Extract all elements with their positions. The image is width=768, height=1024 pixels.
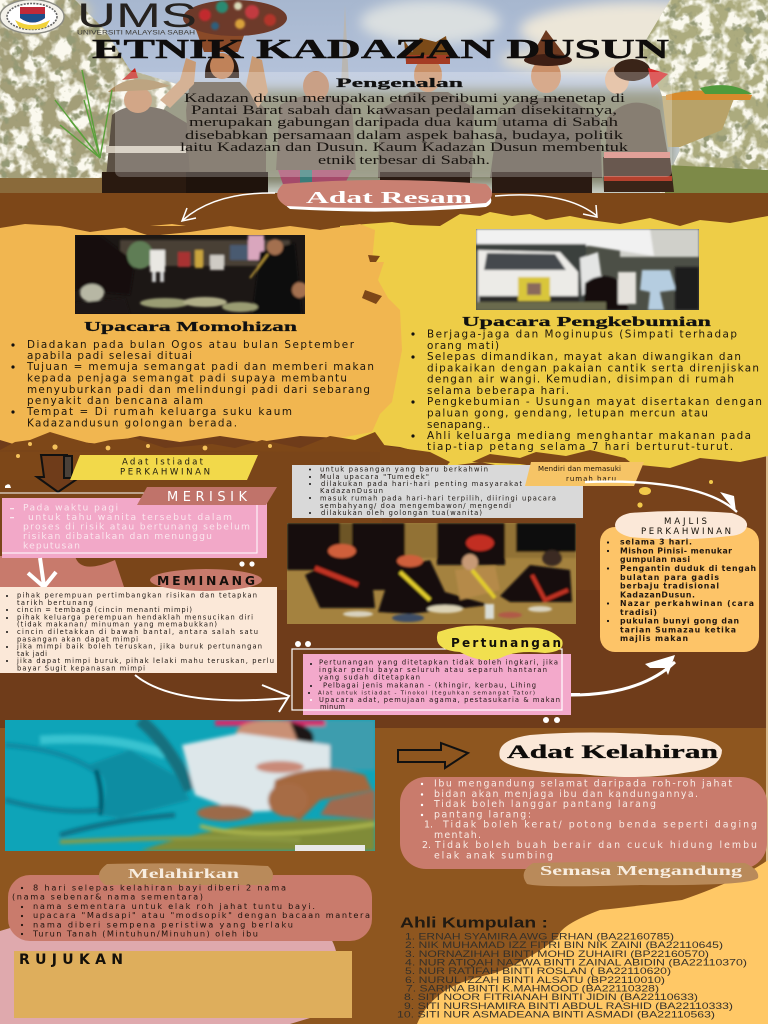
panel: Meminang: jika mimpi baik boleh teruskan, jika buruk pertunangan (16, 643, 262, 651)
heading: Upacara Momohizan: Upacara Momohizan (84, 320, 297, 335)
panel: Meminang: jika dapat mimpi buruk, pihak lelaki mahu teruskan, perlu (16, 657, 274, 665)
text block: Momohizan bullets: Tempat = Di rumah keluarga suku kaum (26, 406, 292, 418)
arrow: Pertunangan to Majlis (571, 655, 675, 695)
intro text block: disebabkan persamaan dalam aspek bahasa, budaya, politik (185, 128, 624, 142)
person 4 (378, 36, 474, 193)
text block: Ahli Kumpulan members: 3. NORNAZIHAH BINTI MOHD ZUHAIRI (BP22160570) (405, 949, 709, 959)
panel: Majlis Perkahwinan: bulatan para gadis (620, 573, 719, 582)
panel: Melahirkan: Melahirkan (128, 866, 240, 881)
panel: Semasa Mengandung: Ibu mengandung selamat daripada roh-roh jahat (434, 778, 732, 790)
panel: Majlis Perkahwinan: berbaju tradisional (620, 582, 719, 590)
panel: Majlis Perkahwinan: selama 3 hari. (620, 538, 692, 546)
panel: Meminang: bayar Sugit kepanasan mimpi (17, 664, 145, 672)
translucent intro panel (115, 72, 672, 177)
panel: Semasa Mengandung: Tidak boleh langgar pantang larang (433, 799, 656, 810)
panel: Melahirkan: (nama sebenar& nama sementara) (12, 892, 203, 902)
text block: Pengkebumian bullets: dengan air wangi. Kemudian, disimpan di rumah (427, 374, 734, 386)
text block: Pengkebumian bullets: Berjaga-jaga dan Moginupus (Simpati terhadap (427, 328, 737, 340)
panel: Pertunangan: Upacara adat, pemujaan agama, pestasukaria & makan (319, 696, 560, 704)
text block: Pengkebumian bullets: Selepas dimandikan, mayat akan diwangikan dan (427, 351, 741, 363)
panel: Majlis Perkahwinan: Mishon Pinisi- menukar (620, 546, 732, 556)
panel: Meminang: cincin = tembaga (cincin menanti mimpi) (17, 606, 192, 614)
banner: Adat Resam: Adat Resam (306, 188, 472, 207)
panel: Majlis Perkahwinan: MAJLIS (664, 517, 707, 527)
photo: Upacara Momohizan (75, 235, 308, 314)
panel: yellow right background (340, 212, 768, 470)
panel: Pertunangan: ingkar perlu bayar seluruh atau separuh hantaran (319, 666, 547, 674)
photo: Tunang ceremony (287, 523, 576, 624)
panel: Melahirkan: nama sementara untuk elak roh jahat tuntu bayi. (33, 901, 315, 911)
panel: Rujukan (14, 951, 352, 1018)
panel: Meminang: pasangan akan dapat mimpi (17, 635, 138, 643)
intro text block: laitu Kadazan dan Dusun. Kaum Kadazan Dusun membentuk (180, 140, 629, 154)
text block: Pengkebumian bullets: Pengkebumian - Usungan mayat disertakan dengan (427, 396, 762, 408)
panel: Melahirkan: nama diberi sempena peristiwa yang berlaku (33, 920, 293, 930)
panel: Semasa Mengandung: 2. (422, 840, 431, 851)
banner: Adat Istiadat Perkahwinan: Adat Istiadat (122, 458, 204, 468)
banner: Adat Istiadat Perkahwinan: PERKAHWINAN (120, 468, 210, 478)
panel: Semasa Mengandung: pantang larang: (434, 810, 531, 820)
intro text block: Kadazan dusun merupakan etnik peribumi yang menetap di (184, 91, 626, 105)
person 5 (490, 30, 602, 193)
arrow: curved to Majlis Perkahwinan (585, 480, 737, 512)
panel: Majlis Perkahwinan: Pengantin duduk di tengah (620, 564, 756, 573)
panel: grey Tumedek notes: dilakukan pada hari-hari penting masyarakat (321, 480, 522, 488)
text block: Ahli Kumpulan members: 9. SITI NURSHAMIRA BINTI ABDUL RASHID (BA22110333) (404, 1001, 733, 1011)
text block: Ahli Kumpulan members: 2. NIK MUHAMAD IZZ FITRI BIN NIK ZAINI (BA22110645) (405, 940, 723, 950)
panel: Meminang: (tidak makanan/ minuman yang memabukkan) (17, 621, 217, 629)
intro text block: Pengenalan (336, 75, 464, 90)
panel: Majlis Perkahwinan: gumpulan nasi (620, 555, 690, 564)
panel: Merisik (0, 484, 277, 558)
panel: Meminang: tak jadi (17, 650, 47, 658)
text block: Momohizan bullets (11, 339, 374, 430)
text block: Ahli Kumpulan members: 1. ERNAH SYAMIRA AWG ERHAN (BA22160785) (405, 932, 674, 942)
text block: Pengkebumian bullets: tiap-tiap petang selama 7 hari berturut-turut. (427, 441, 733, 453)
panel: orange left background (0, 224, 402, 446)
panel: Merisik: untuk tahu wanita tersebut dalam (28, 512, 232, 523)
panel: Majlis Perkahwinan: majlis makan (620, 634, 688, 643)
intro text block: Pantai Barat sabah dan kawasan pedalaman disekitarnya, (191, 103, 617, 117)
banner: Mandiri dan memasuki rumah baru: Mendiri dan memasuki (538, 465, 621, 473)
text block: Pengkebumian bullets: orang mati) (427, 340, 499, 352)
arrow: curved to Pertunangan (135, 675, 289, 712)
text block: Pengkebumian bullets: dipakaikan dengan pakaian cantik serta direnjiskan (427, 362, 759, 374)
text block: Pengkebumian bullets: selama beberapa hari. (427, 385, 569, 397)
panel: grey Tumedek notes: sembahyang/ doa mengembawon/ mengendi (320, 502, 511, 510)
panel: Majlis Perkahwinan: pukulan bunyi gong dan (620, 616, 739, 626)
panel: Melahirkan (8, 863, 372, 941)
text block: Momohizan bullets: Tujuan = memuja semangat padi dan memberi makan (26, 361, 374, 373)
panel: Semasa Mengandung: 1. (424, 820, 433, 830)
panel: Merisik: keputusan (23, 540, 80, 552)
banner: Mandiri dan memasuki rumah baru (525, 462, 644, 486)
banner: Adat Istiadat Perkahwinan (70, 455, 258, 480)
panel: Meminang: MEMINANG (157, 573, 255, 588)
panel: Pertunangan (292, 625, 571, 715)
quote marks: Pertunangan (295, 641, 311, 647)
wordmark: UMS (77, 0, 197, 36)
text block: Ahli Kumpulan members: 8. SITI NOOR FITRIANAH BINTI JIDIN (BA22110633) (404, 992, 698, 1002)
person 1 (55, 68, 192, 193)
panel: Majlis Perkahwinan (600, 511, 759, 652)
person 2 with basket (160, 0, 287, 193)
panel: Melahirkan: 8 hari selepas kelahiran bayi diberi 2 nama (33, 882, 286, 892)
arrow: white down (28, 558, 56, 587)
panel: Majlis Perkahwinan: KadazanDusun. (620, 590, 695, 600)
brown band and torn paper panels (0, 193, 768, 480)
panel: Meminang: cincin diletakkan di bawah bantal, antara salah satu (17, 628, 258, 636)
text block: Ahli Kumpulan members: 5. NUR RATIFAH BINTI ROSLAN ( BA22110620) (405, 966, 671, 976)
panel: Semasa Mengandung: bidan akan menjaga ibu dan kandungannya. (434, 789, 698, 800)
text block: Pengkebumian bullets: senapang.. (427, 419, 490, 431)
icon: outlined right arrow (398, 743, 468, 768)
panel: grey Tumedek notes: untuk pasangan yang baru berkahwin (320, 466, 488, 474)
logo: Universiti Malaysia Sabah crest (0, 0, 64, 34)
pink blob behind Rujukan (0, 925, 352, 1024)
heading: Adat Kelahiran (499, 732, 722, 777)
panel: grey Tumedek notes (292, 465, 583, 518)
text block: Ahli Kumpulan members: 10. SITI NUR ASMADEANA BINTI ASMADI (BA22110563) (397, 1010, 715, 1020)
panel: Melahirkan: Turun Tanah (Mintuhun/Minuhun) oleh ibu (32, 928, 258, 938)
panel: grey Tumedek notes: dilakukan oleh golongan tua(wanita) (321, 509, 482, 517)
panel: Majlis Perkahwinan: tarian Sumazau ketika (620, 626, 736, 634)
panel: Meminang: pihak keluarga perempuan hendaklah mensucikan diri (17, 613, 253, 621)
decorative rose blob behind Merisik and Meminang (0, 556, 125, 590)
panel: Majlis Perkahwinan: Nazar perkahwinan (cara (620, 599, 754, 608)
panel: grey Tumedek notes: Mula upacara "Tumedek" (320, 473, 429, 481)
torn brown splatter (0, 226, 640, 480)
text block: Momohizan bullets: menyuburkan padi dan melindungi padi dari sebarang (27, 384, 370, 396)
panel: grey Tumedek notes: KadazanDusun (320, 487, 383, 495)
panel: Semasa Mengandung: mentah. (434, 830, 481, 841)
panel: Meminang: pihak perempuan pertimbangkan risikan dan tetapkan (17, 592, 257, 600)
decorative white line and quote mark (543, 694, 580, 723)
heading: Adat Kelahiran: Adat Kelahiran (507, 742, 719, 763)
text block: Momohizan bullets: kepada penjaga semangat padi supaya membantu (27, 372, 347, 384)
panel: Pertunangan: yang sudah ditetapkan (319, 674, 420, 682)
panel: Semasa Mengandung: Semasa Mengandung (540, 864, 742, 879)
panel: Merisik: proses di risik atau bertunang sebelum (23, 522, 250, 532)
text block: Pengkebumian bullets (411, 328, 762, 453)
panel: Pertunangan: Alat untuk istiadat - Tinokol (teguhkan semangat Tator) (318, 690, 535, 696)
banner: Mandiri dan memasuki rumah baru: rumah baru (566, 475, 616, 483)
arrow: right curved (495, 195, 597, 217)
heading: Upacara Pengkebumian: Upacara Pengkebumian (462, 315, 711, 330)
panel: Melahirkan: upacara "Madsapi" atau "modsopik" dengan bacaan mantera (33, 910, 370, 920)
text block: Ahli Kumpulan members (397, 916, 747, 1020)
text block: Pengkebumian bullets: paluan gong, gendang, letupan mercun atau (427, 408, 708, 420)
wordmark: UMS: UNIVERSITI MALAYSIA SABAH (77, 30, 195, 36)
panel: Semasa Mengandung: Tidak boleh kerat/ potong benda seperti daging (442, 820, 757, 830)
photo: Upacara Pengkebumian (476, 229, 699, 310)
panel: Pertunangan: minum (320, 703, 345, 711)
intro text block (180, 75, 629, 167)
text block: Momohizan bullets: Kadazandusun golongan berada. (27, 418, 237, 430)
panel: Semasa Mengandung: Tidak boleh buah berair dan cucuk hidung lembu (434, 840, 757, 851)
text block: Ahli Kumpulan members: 6. NURUL IZZAH BINTI ALSATU (BP22110010) (405, 975, 665, 985)
title: ETNIK KADAZAN DUSUN (92, 34, 670, 64)
panel: Rujukan: RUJUKAN (19, 952, 123, 968)
panel: grey Tumedek notes: masuk rumah pada hari-hari terpilih, diiringi upacara (320, 494, 556, 502)
text block: Momohizan bullets: penyakit dan bencana alam (27, 395, 203, 407)
text block: Momohizan bullets: Diadakan pada bulan Ogos atau bulan September (27, 339, 355, 351)
arrow: left curved (182, 193, 275, 221)
panel: Merisik: Pada waktu pagi (23, 502, 118, 514)
panel: Majlis Perkahwinan: PERKAHWINAN (641, 527, 731, 537)
text block: Pengkebumian bullets: Ahli keluarga mediang menghantar makanan pada (427, 430, 751, 442)
person 3 (276, 71, 356, 193)
panel: Merisik: MERISIK (167, 490, 247, 505)
text block: Momohizan bullets: apabila padi selesai dituai (27, 350, 192, 362)
peach corner shape (417, 860, 768, 1024)
panel: Pertunangan: Pelbagai jenis makanan - (khingir, kerbau, Lihing (323, 682, 536, 690)
panel: Semasa Mengandung: elak anak sumbing (434, 850, 553, 862)
panel: Meminang: tarikh bertunang (17, 599, 93, 607)
panel: Meminang (0, 561, 277, 673)
panel: Merisik: risikan dibatalkan dan menunggu (23, 531, 212, 542)
banner: Adat Resam (277, 180, 492, 212)
panel: Majlis Perkahwinan: tradisi) (620, 608, 657, 617)
text block: Ahli Kumpulan members: 4. NUR ATIQAH NAZWA BINTI ZAINAL ABIDIN (BA22110370) (405, 958, 747, 968)
photo: newborn baby (5, 720, 375, 851)
text block: Ahli Kumpulan members: Ahli Kumpulan : (400, 916, 548, 932)
intro text block: etnik terbesar di Sabah. (318, 153, 490, 167)
person 6 with basket (603, 59, 752, 192)
panel: Pertunangan: Pertunangan yang ditetapkan tidak boleh ingkari, jika (319, 658, 558, 666)
hero illustration: Kadazan Dusun people (0, 0, 768, 193)
panel: Semasa Mengandung (400, 777, 767, 886)
icon: outlined down arrow (37, 455, 80, 492)
text block: Ahli Kumpulan members: 7. SARINA BINTI K.MAHMOOD (BA22110328) (406, 984, 659, 994)
panel: Pertunangan: Pertunangan (451, 636, 561, 650)
intro text block: merupakan gabungan daripada dua kaum utama di Sabah (189, 115, 619, 129)
